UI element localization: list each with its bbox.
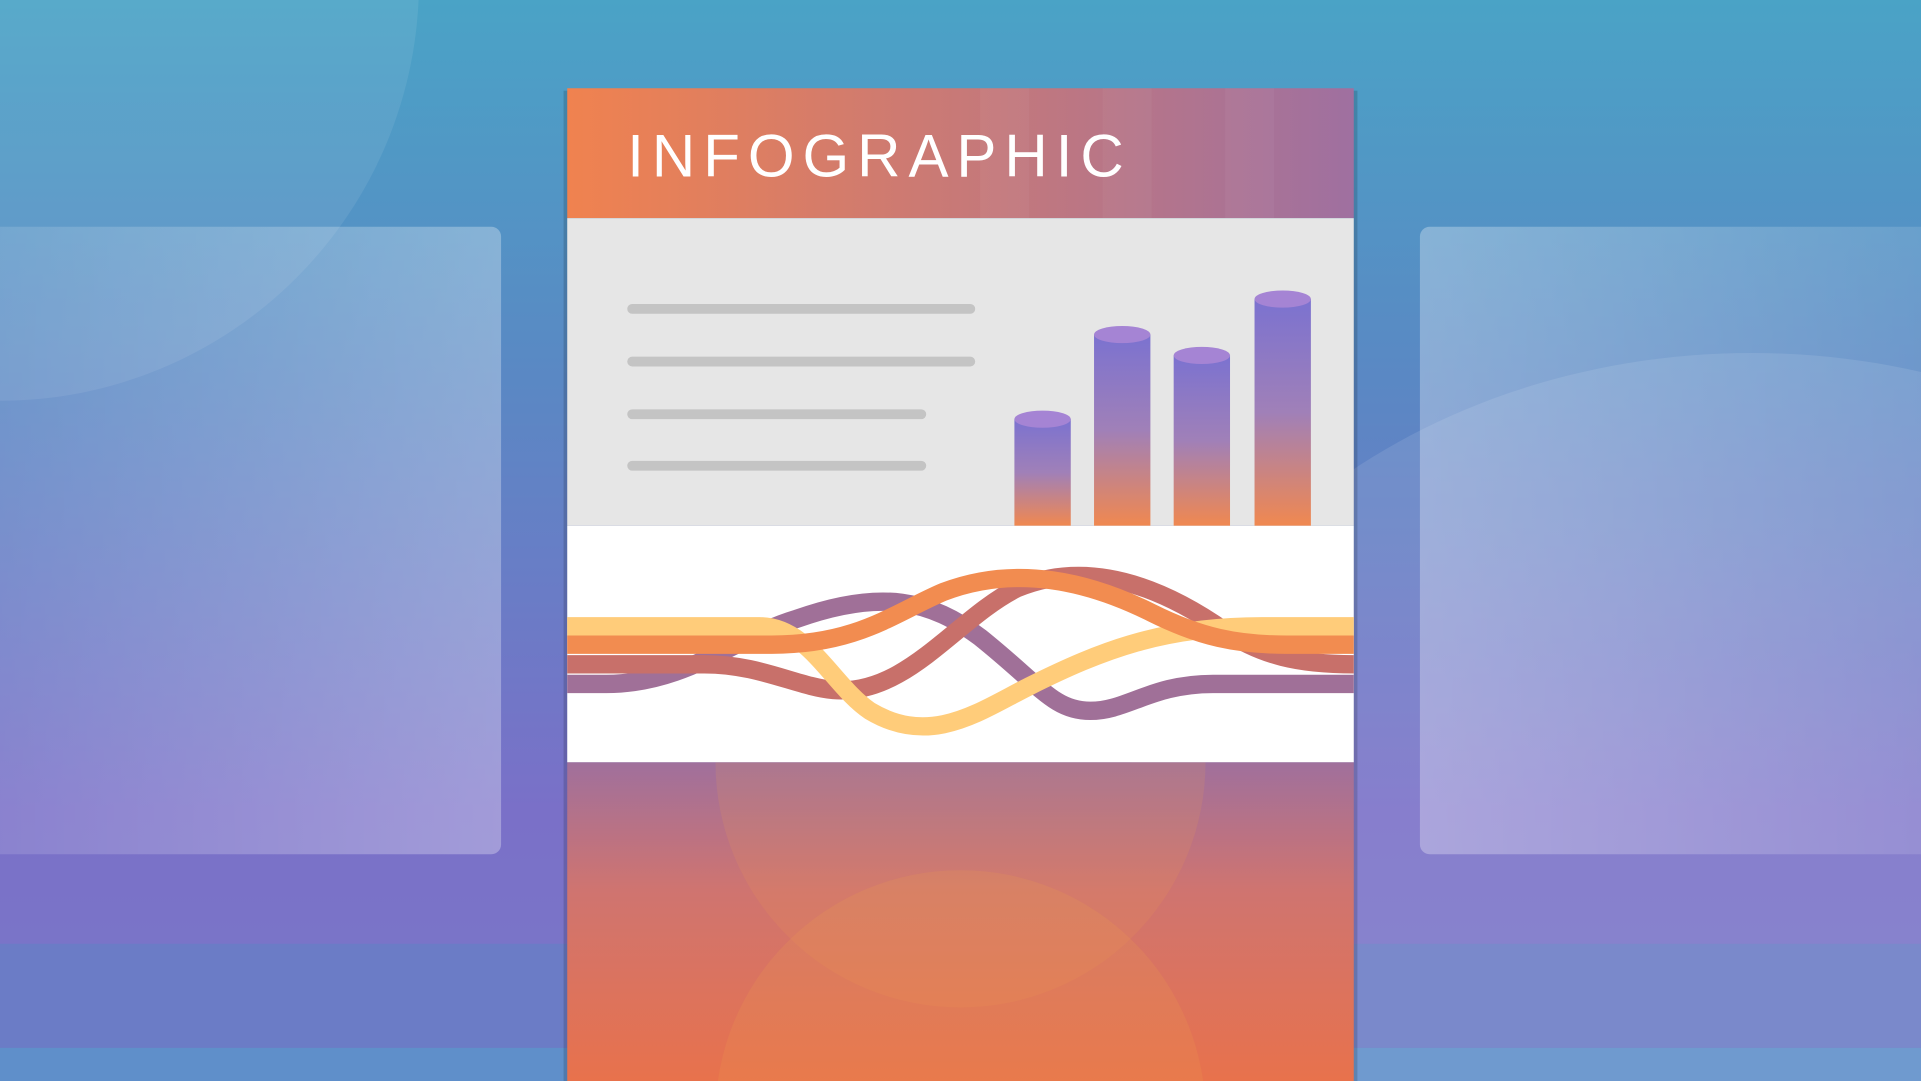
title: INFOGRAPHIC [627,122,1132,189]
white band [567,526,1354,762]
panel: left glass card [0,227,501,854]
bar chart: cylinders [1014,290,1311,526]
panel: right glass card [1420,227,1921,854]
header [567,88,1354,218]
gray content area [567,218,1354,526]
bottom gradient panel [567,762,1354,1081]
text lines [632,309,970,466]
panel: main infographic card [564,88,1357,1081]
wavy lines [567,576,1354,726]
